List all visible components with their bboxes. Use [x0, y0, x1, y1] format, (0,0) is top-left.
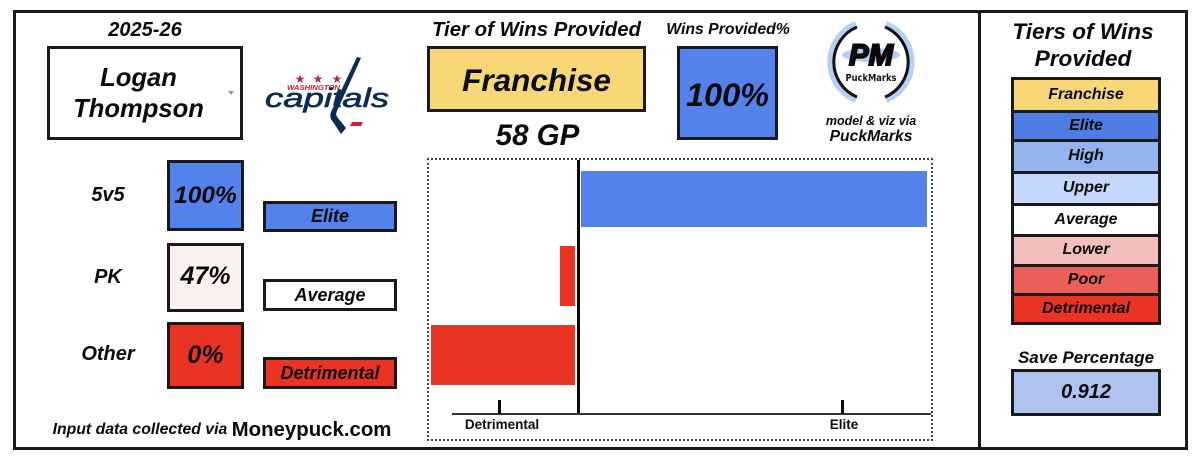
icon: Washington Capitals logo: ★: [332, 72, 342, 86]
right panel divider: [978, 11, 981, 449]
legend row: Lower: [1014, 237, 1158, 267]
legend row: Average: Average: [1054, 210, 1118, 228]
tier value box: [427, 46, 646, 112]
legend row: Lower: Lower: [1062, 241, 1110, 258]
season heading: 2025-26: [108, 18, 182, 40]
save percentage value box: 0.912: [1061, 381, 1111, 403]
legend row: Franchise: [1014, 80, 1158, 113]
row label: Other: Other: [81, 342, 135, 364]
PK percentile box: [167, 243, 244, 312]
icon: Washington Capitals logo: capitals: [265, 83, 389, 113]
games played: 58 GP: [496, 119, 579, 152]
wins provided heading: Wins Provided%: [666, 21, 790, 38]
data source credit: Moneypuck.com: [232, 418, 391, 440]
5v5 percentile box: [167, 160, 244, 231]
legend row: Elite: Elite: [1069, 116, 1103, 134]
Other percentile box: [167, 322, 244, 389]
legend heading: Tiers of Wins: [1012, 19, 1154, 44]
axis tick: Elite: [841, 400, 844, 414]
icon: Washington Capitals logo: ★: [295, 72, 305, 86]
legend: tiers of wins provided: [1011, 77, 1161, 325]
5v5 tier box: Elite: [311, 206, 349, 226]
data source credit: [52, 418, 391, 440]
player name selector: Thompson: [73, 95, 204, 123]
PK tier box: Average: [294, 284, 366, 304]
wins provided value box: 100%: [686, 76, 769, 112]
legend row: Franchise: Franchise: [1048, 86, 1124, 102]
PK tier box: [263, 279, 397, 311]
Other percentile box: 0%: [187, 341, 224, 369]
legend row: Detrimental: Detrimental: [1042, 300, 1130, 316]
axis label: Elite: Elite: [830, 417, 858, 432]
legend row: Poor: [1014, 267, 1158, 296]
icon: Washington Capitals logo: [265, 57, 389, 134]
legend row: High: [1014, 142, 1158, 174]
icon: PuckMarks logo: PM: [849, 39, 894, 72]
legend heading: Provided: [1035, 46, 1131, 71]
player name selector: [47, 46, 243, 140]
x axis: [452, 413, 931, 415]
model credit: PuckMarks: [830, 128, 912, 144]
legend heading: [1012, 19, 1154, 71]
save percentage value box: [1011, 369, 1161, 416]
PK bar: [560, 246, 575, 306]
row label: 5v5: 5v5: [91, 184, 125, 206]
icon: Washington Capitals logo: ★: [313, 72, 323, 86]
5v5 percentile box: 100%: [174, 182, 237, 208]
legend row: Upper: Upper: [1063, 179, 1109, 196]
wins provided value box: [677, 46, 778, 140]
bar chart: wins provided by situation: [427, 158, 933, 441]
5v5 bar: [581, 171, 927, 227]
icon: PuckMarks logo: [827, 21, 915, 103]
PK percentile box: 47%: [180, 262, 231, 290]
legend row: Average: [1014, 206, 1158, 237]
save percentage heading: Save Percentage: [1018, 348, 1154, 367]
icon: PuckMarks logo: PuckMarks: [846, 73, 897, 84]
legend row: Poor: Poor: [1068, 270, 1104, 288]
row label: PK: PK: [94, 266, 122, 288]
model credit: model & viz via: [826, 114, 916, 128]
Other bar: [431, 325, 575, 385]
axis tick: Detrimental: [498, 400, 501, 414]
legend row: Detrimental: [1014, 296, 1158, 322]
legend row: Elite: [1014, 113, 1158, 142]
icon: Washington Capitals logo: WASHINGTON: [287, 85, 341, 92]
Other tier box: Detrimental: [280, 362, 380, 382]
model credit: [826, 114, 916, 144]
player name selector: Logan: [100, 64, 177, 92]
zero line: [577, 160, 580, 414]
axis label: Detrimental: Detrimental: [465, 417, 539, 432]
legend row: High: High: [1068, 147, 1104, 164]
legend row: Upper: [1014, 174, 1158, 206]
Other tier box: [263, 357, 397, 389]
tier value box: Franchise: [462, 62, 611, 98]
dropdown arrow: [228, 91, 234, 95]
5v5 tier box: [263, 201, 397, 232]
data source credit: Input data collected via: [53, 421, 227, 438]
tier heading: Tier of Wins Provided: [432, 18, 641, 40]
